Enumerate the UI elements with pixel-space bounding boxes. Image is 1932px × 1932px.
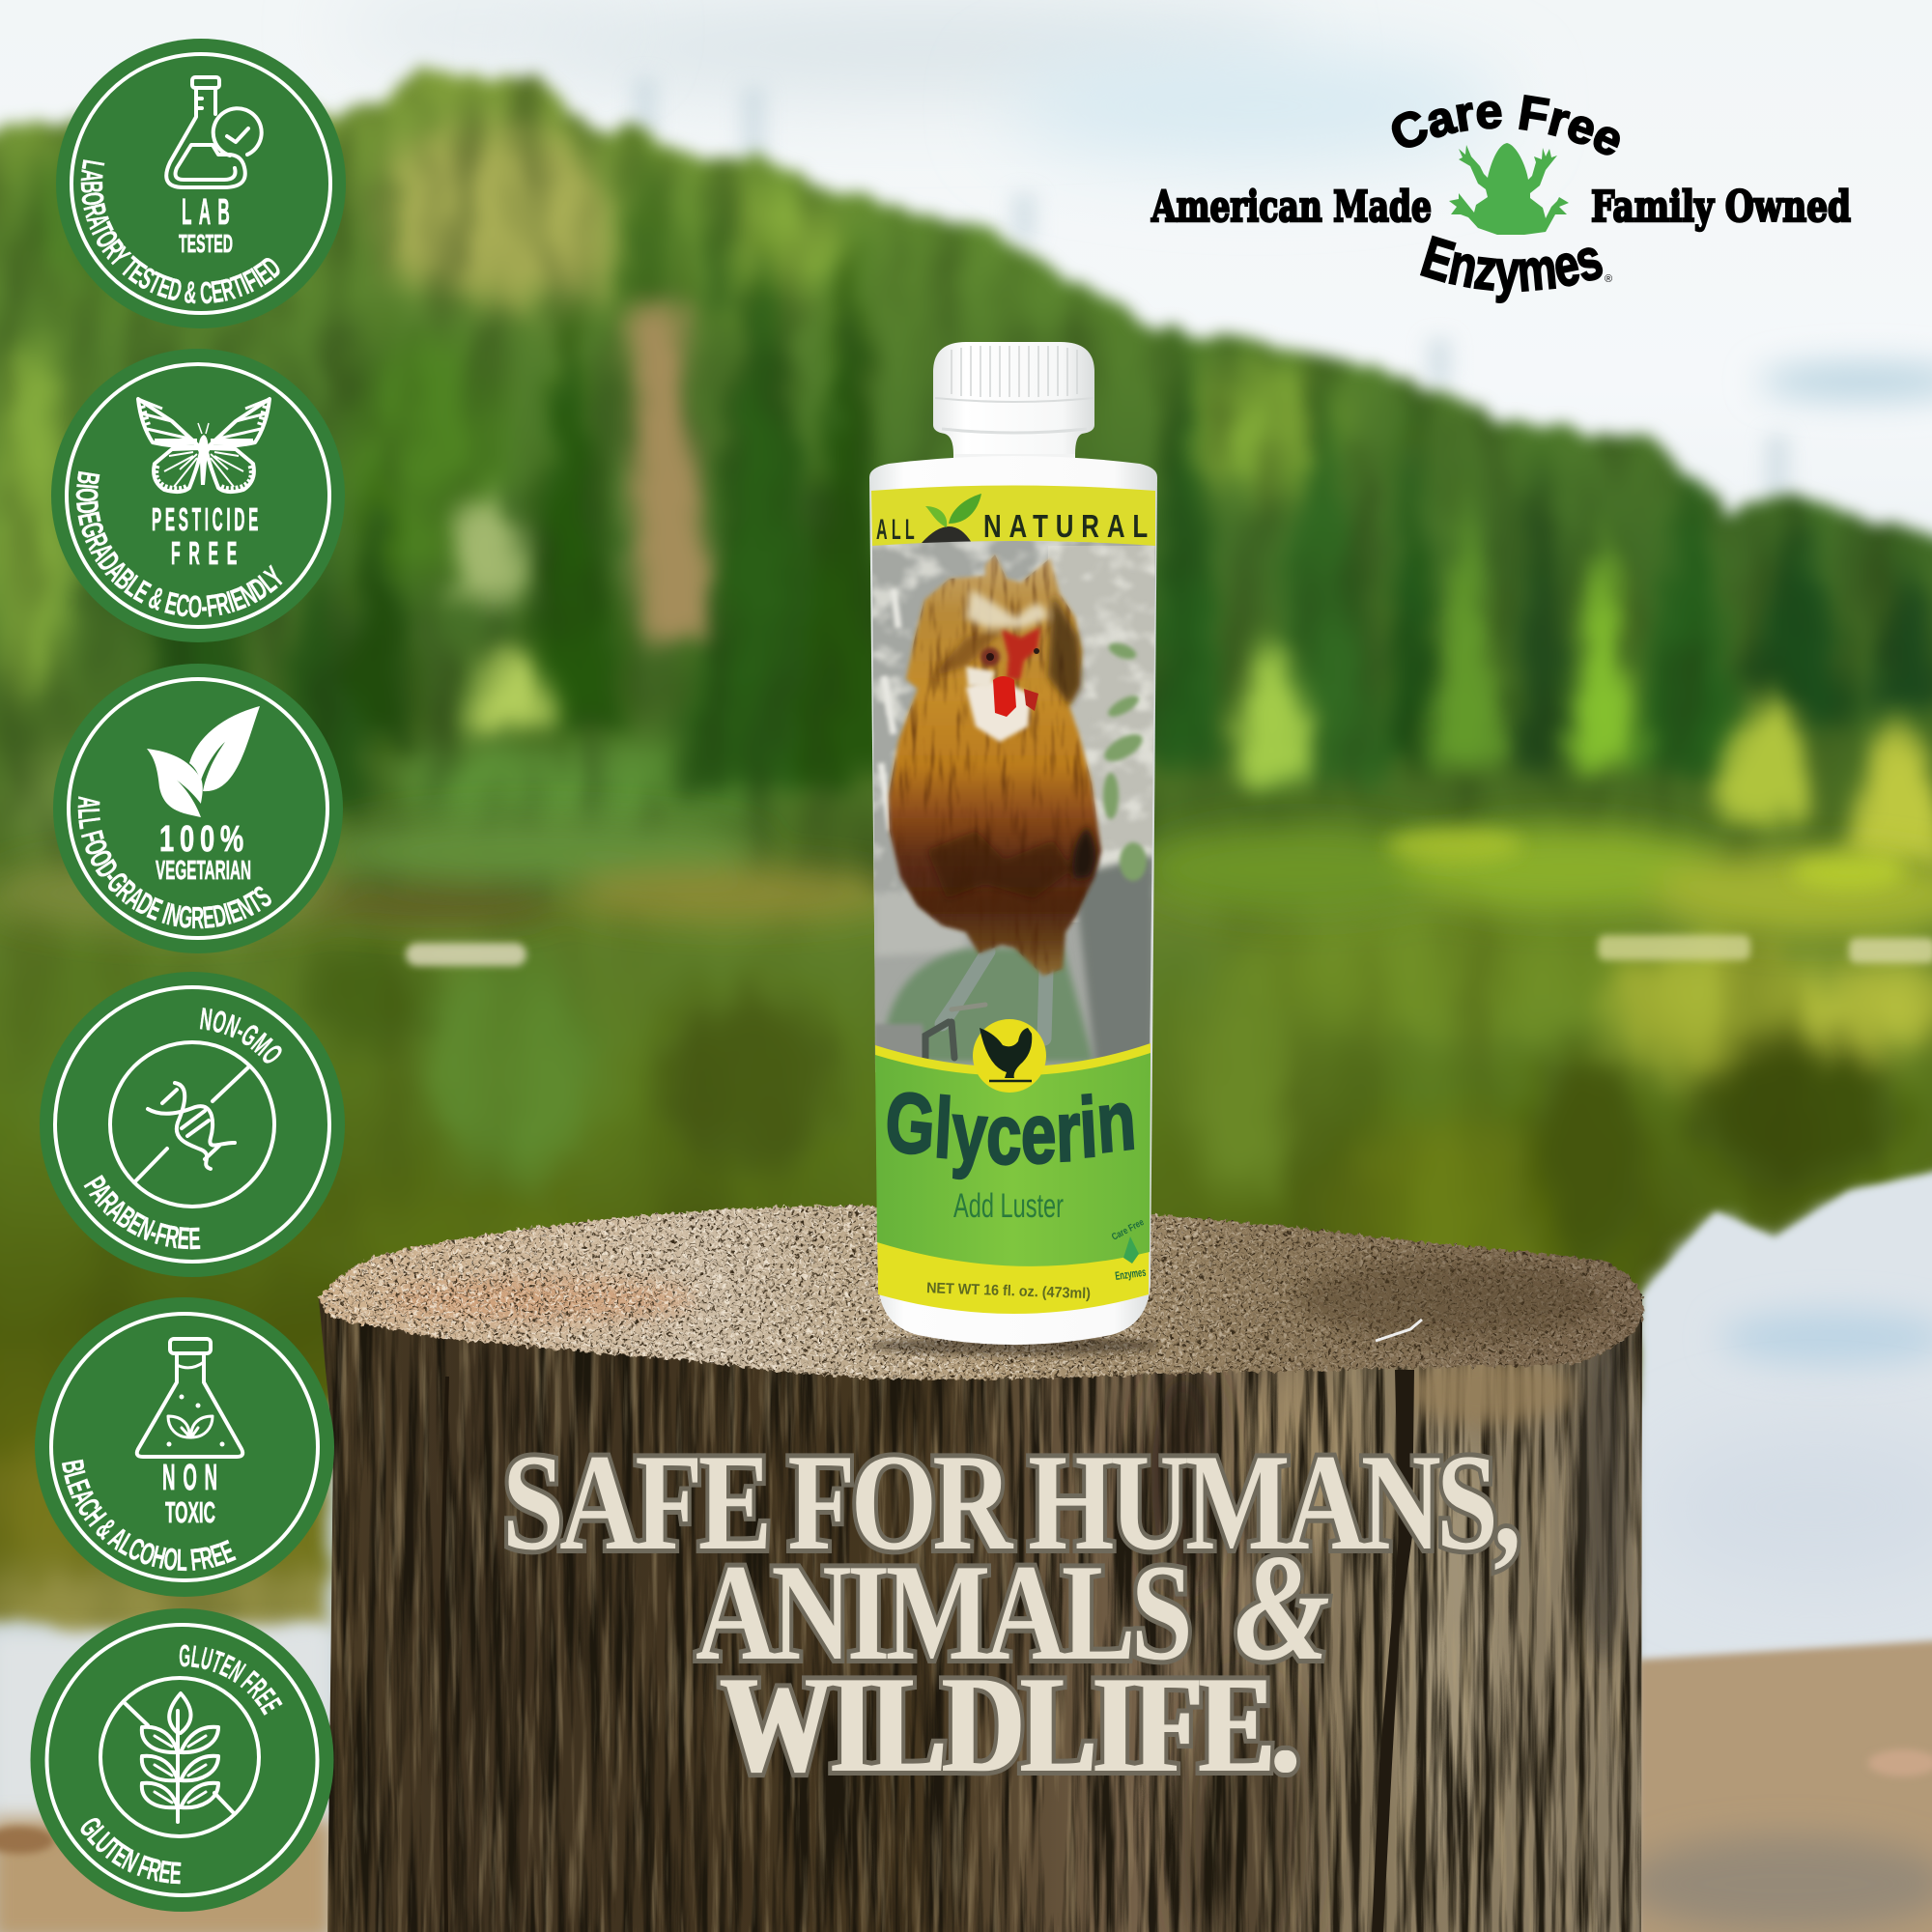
forest highlights (454, 307, 1932, 869)
bottle body (869, 456, 1157, 1345)
badge: gluten free (31, 1608, 334, 1912)
mini logo: Enzymes (1114, 1265, 1147, 1283)
label photo with hen (869, 536, 1159, 1077)
white fibre on stump (1376, 1320, 1422, 1341)
headline: SAFE FOR HUMANS, (502, 1426, 1518, 1578)
badge: 100% vegetarian (53, 664, 343, 953)
sky (0, 0, 1932, 773)
lake shore bands (0, 819, 1932, 966)
product bottle (869, 342, 1159, 1345)
yellow ALL NATURAL band: ALL (876, 514, 919, 546)
logo: Care Free Enzymes (1151, 84, 1851, 303)
headline: WILDLIFE. (721, 1648, 1296, 1801)
curved text: gluten free top: GLUTEN FREE (179, 1638, 289, 1719)
green front label (875, 1019, 1151, 1314)
badge: non toxic: NON (162, 1458, 225, 1498)
bottle cap (933, 342, 1094, 462)
curved claim text: BLEACH & ALCOHOL FREE (55, 1458, 240, 1577)
curved claim text: BIODEGRADABLE & ECO-FRIENDLY (75, 471, 282, 618)
badge: lab tested (56, 39, 346, 328)
badge: 100% vegetarian: VEGETARIAN (156, 855, 251, 885)
curved text: non-gmo: NON-GMO (198, 1001, 290, 1070)
bottle shadow (869, 1336, 1159, 1355)
curved text: gluten free bottom: GLUTEN FREE (72, 1811, 183, 1890)
stump side (309, 1294, 1652, 1932)
stump top (309, 1198, 1652, 1391)
dark conifers (130, 126, 1932, 811)
mini logo (1110, 1217, 1147, 1283)
logo name bottom: Enzymes (1414, 224, 1609, 303)
badge title: 100% (159, 819, 249, 860)
curved claim text: LABORATORY TESTED & CERTIFIED (81, 159, 280, 303)
headline: ANIMALS & (696, 1523, 1328, 1692)
icon: flask with leaf (137, 1339, 242, 1457)
lake with forest reflection (0, 869, 1932, 1642)
badge: lab tested: TESTED (179, 229, 233, 258)
mini logo: Care Free (1110, 1217, 1146, 1243)
flask bubbles (166, 1395, 224, 1447)
subtitle: Add Luster (953, 1187, 1064, 1225)
net weight: NET WT 16 fl. oz. (473ml) (926, 1280, 1091, 1302)
hen emblem (973, 1019, 1046, 1093)
badge: non-gmo (40, 972, 345, 1277)
logo name top: Care Free (1382, 84, 1632, 168)
curved text: paraben-free: PARABEN-FREE (77, 1170, 201, 1256)
hen dark plumage (927, 589, 1095, 898)
leaves on right of photo (1100, 639, 1147, 881)
icon: flask with check (166, 77, 262, 187)
badge: lab tested: LAB (182, 192, 237, 233)
icon: crossed wheat (124, 1693, 234, 1822)
hen face (966, 627, 1040, 742)
product name: Glycerin (883, 1072, 1139, 1182)
badge: non toxic: TOXIC (165, 1495, 215, 1529)
photo background ground (874, 855, 1154, 1072)
icon: leaves (147, 706, 260, 817)
icon: green frog (1449, 143, 1569, 235)
hen body (889, 554, 1101, 976)
yellow ALL NATURAL band: NATURAL (983, 508, 1155, 544)
icon: butterfly (138, 399, 270, 492)
hen feather texture (889, 554, 1101, 976)
yellow ALL NATURAL band (871, 485, 1155, 549)
upper hillside olive crown (382, 126, 618, 309)
badge: non toxic (35, 1297, 334, 1597)
sky reflection and shore (0, 1171, 1932, 1932)
curved claim text: ALL FOOD-GRADE INGREDIENTS (71, 796, 277, 935)
leaf sprout icon (922, 494, 981, 543)
forest hillside (0, 48, 1932, 966)
icon: crossed dna (134, 1067, 248, 1182)
badge: pesticide free (51, 349, 345, 642)
tree stump (309, 1198, 1652, 1932)
badge: pesticide free: PESTICIDE (152, 501, 262, 537)
registered mark: ® (1605, 273, 1612, 285)
hen legs (925, 952, 1046, 1058)
tagline right: Family Owned (1591, 183, 1851, 232)
badge: pesticide free: FREE (171, 535, 245, 571)
tagline left: American Made (1151, 183, 1432, 232)
headline (502, 1426, 1518, 1801)
